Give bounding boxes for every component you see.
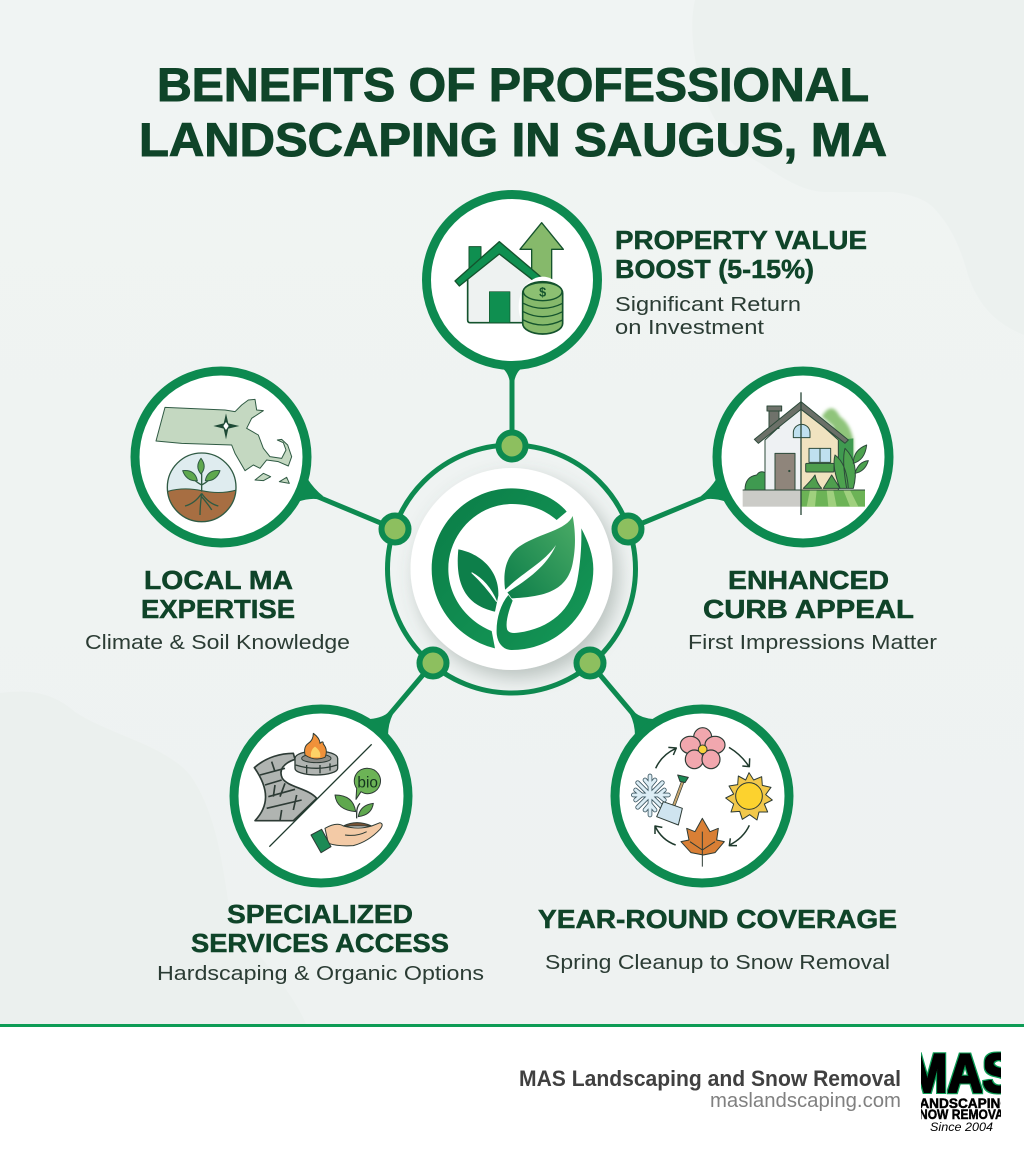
heading: ENHANCED <box>728 565 889 595</box>
company logo <box>921 1052 1001 1131</box>
title: BENEFITS OF PROFESSIONAL <box>157 58 869 111</box>
heading <box>141 565 295 624</box>
icon: house, arrow and coins: $ <box>539 285 546 299</box>
heading: YEAR-ROUND COVERAGE <box>538 904 897 934</box>
description: Spring Cleanup to Snow Removal <box>545 951 890 974</box>
heading <box>615 225 867 284</box>
description: Climate & Soil Knowledge <box>85 631 350 654</box>
hub nodes <box>382 432 642 676</box>
icon: Massachusetts map and plant in soil <box>156 399 292 523</box>
panel: property value <box>426 194 867 366</box>
footer <box>0 1024 1024 1131</box>
description: on Investment <box>615 316 764 339</box>
heading: PROPERTY VALUE <box>615 225 867 255</box>
company logo: LANDSCAPING <box>911 1096 1011 1111</box>
heading <box>191 899 449 958</box>
heading: SPECIALIZED <box>227 899 413 929</box>
description: First Impressions Matter <box>688 631 937 654</box>
heading: BOOST (5-15%) <box>615 254 814 284</box>
panel: specialized services <box>157 709 484 985</box>
heading: LOCAL MA <box>144 565 293 595</box>
panel: year-round coverage <box>538 709 897 974</box>
heading: SERVICES ACCESS <box>191 928 449 958</box>
connectors <box>297 362 727 736</box>
icon: hardscape and organic: bio <box>357 774 378 791</box>
heading <box>703 565 914 624</box>
icon circle <box>717 371 889 543</box>
icon: four seasons cycle <box>633 728 772 867</box>
central leaf logo <box>432 488 593 650</box>
company logo: Since 2004 <box>930 1120 993 1134</box>
company name: MAS Landscaping and Snow Removal <box>519 1066 901 1091</box>
panel: curb appeal <box>688 371 937 654</box>
icon: house, arrow and coins <box>455 223 567 337</box>
title <box>139 58 887 166</box>
description: Hardscaping & Organic Options <box>157 962 484 985</box>
icon circle <box>135 371 307 543</box>
website: maslandscaping.com <box>710 1090 901 1112</box>
icon circle <box>234 709 408 883</box>
heading: EXPERTISE <box>141 594 295 624</box>
icon circle <box>615 709 789 883</box>
title: LANDSCAPING IN SAUGUS, MA <box>139 113 887 166</box>
company logo: SNOW REMOVAL <box>911 1107 1011 1122</box>
heading: CURB APPEAL <box>703 594 914 624</box>
description: Significant Return <box>615 293 801 316</box>
icon: house before and after <box>743 392 868 515</box>
central white disc <box>410 468 612 670</box>
description <box>615 293 801 339</box>
icon circle <box>426 194 598 366</box>
panel: local expertise <box>85 371 350 654</box>
icon: hardscape and organic <box>254 733 382 853</box>
central hub ring <box>388 445 636 693</box>
